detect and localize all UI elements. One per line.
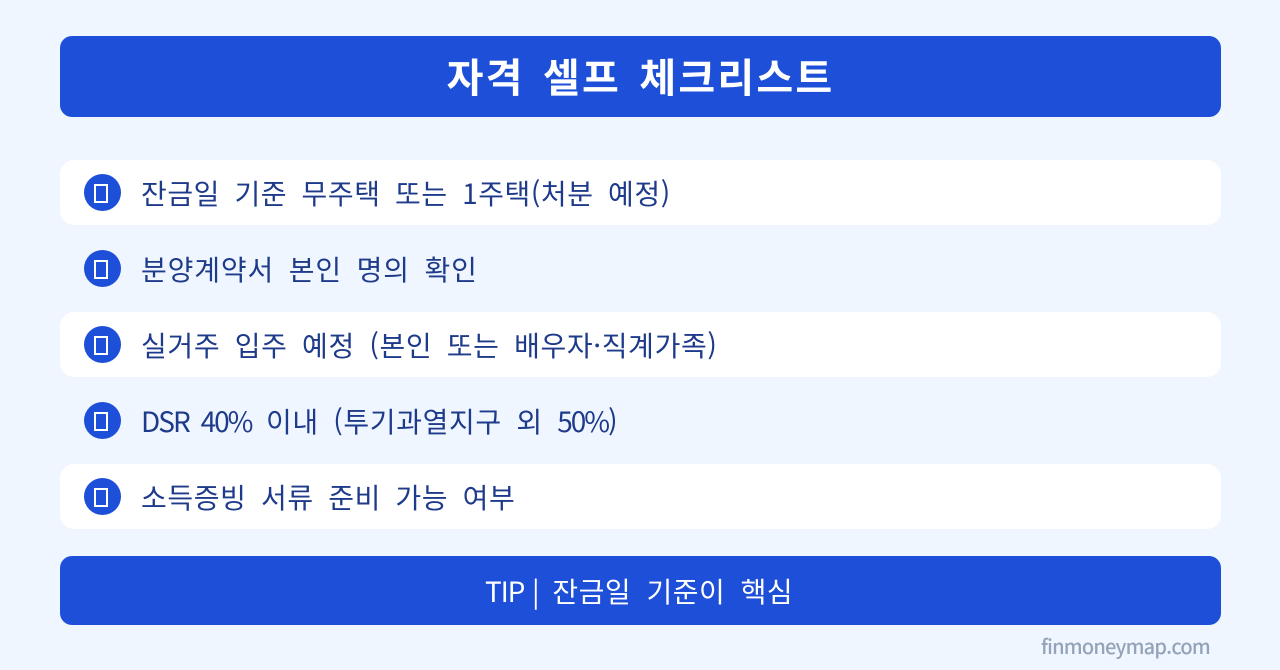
title banner: 자격 셀프 체크리스트 <box>447 46 834 104</box>
item text 2: 분양계약서 본인 명의 확인 <box>141 249 478 289</box>
title banner <box>60 36 1221 117</box>
checklist item 4 <box>84 401 618 441</box>
item text 4: DSR 40% 이내 (투기과열지구 외 50%) <box>141 401 618 441</box>
watermark: finmoneymap.com <box>1041 631 1210 660</box>
checklist item 3 <box>60 312 1221 377</box>
icon: check 3 <box>84 326 121 363</box>
item text 5: 소득증빙 서류 준비 가능 여부 <box>141 477 515 517</box>
icon: check 1 <box>84 174 121 211</box>
icon: check 5 <box>84 478 121 515</box>
item text 1: 잔금일 기준 무주택 또는 1주택(처분 예정) <box>141 173 671 213</box>
checklist item 5 <box>60 464 1221 529</box>
icon: check 4 <box>84 402 121 439</box>
item text 3: 실거주 입주 예정 (본인 또는 배우자·직계가족) <box>141 325 718 365</box>
checklist item 1 <box>60 160 1221 225</box>
checklist item 2 <box>84 249 478 289</box>
tip banner <box>60 556 1221 625</box>
tip banner: TIP | 잔금일 기준이 핵심 <box>485 571 793 611</box>
icon: check 2 <box>84 250 121 287</box>
